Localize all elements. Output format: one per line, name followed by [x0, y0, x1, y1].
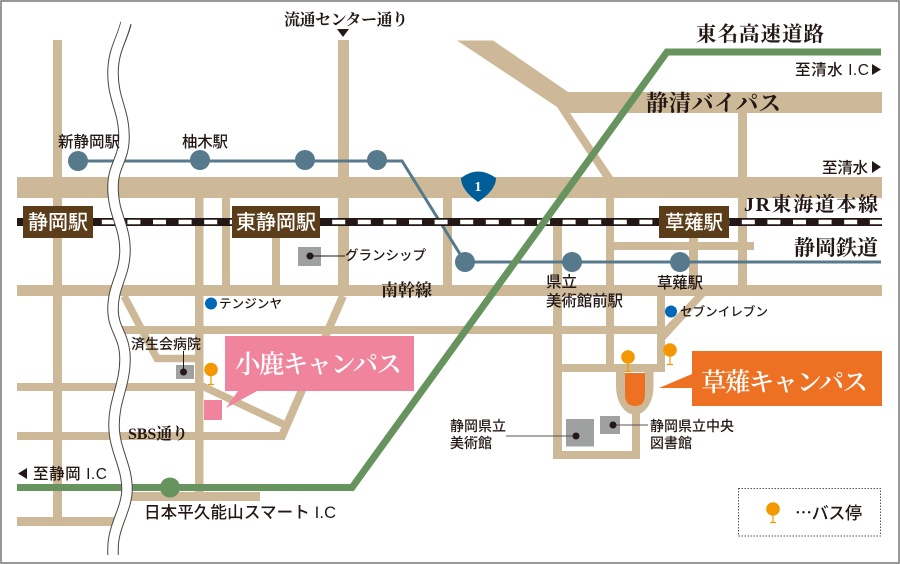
callout: Koshika campus: 小鹿キャンパス: [235, 350, 402, 379]
landmark: Tenjinya: テンジンヤ: [219, 297, 282, 311]
road label: Ryutsu Center-dori: [284, 10, 408, 37]
station label: Kusanagi: [659, 206, 729, 238]
station label: Shizuoka: 静岡駅: [28, 211, 88, 234]
bus stop: Kusanagi east: [663, 343, 677, 364]
line label: JR Tokaido Main Line: JR東海道本線: [744, 192, 878, 216]
road label: Seisei Bypass: 静清バイパス: [646, 91, 781, 116]
marker: Koshika campus: [204, 400, 222, 420]
route 1 shield: [461, 172, 496, 202]
road label: Ryutsu Center-dori: 流通センター通り: [284, 10, 408, 29]
landmark: Shizuoka Prefectural Museum of Art: 美術館: [450, 435, 492, 451]
road label: Nankan Line: 南幹線: [381, 280, 432, 300]
line label: Shizuoka Railway: 静岡鉄道: [794, 236, 878, 260]
label: Nihondaira Kunozan Smart IC: 日本平久能山スマート I.C: [144, 503, 336, 522]
station name: Kenritsu Bijutsukan-mae: 県立: [546, 273, 577, 291]
landmark: Granship: グランシップ: [345, 247, 426, 263]
station label: Kusanagi: 草薙駅: [665, 212, 723, 234]
landmark: Granship: [298, 247, 426, 266]
landmark: Shizuoka Prefectural Central Library: [600, 416, 734, 451]
direction: to Shimizu: 至清水: [822, 159, 868, 177]
marker: Kusanagi campus: [625, 373, 645, 406]
station label: Higashi-Shizuoka: [232, 206, 320, 238]
Tomei Expressway: [17, 52, 881, 498]
direction: to Shimizu IC: 至清水 I.C: [795, 61, 869, 79]
landmark: Saiseikai Hospital: 済生会病院: [131, 336, 201, 352]
road label: SBS-dori: SBS通り: [128, 425, 188, 443]
station name: Kenritsu Bijutsukan-mae: 美術館前駅: [546, 292, 623, 310]
bus stop: Koshika: [204, 363, 218, 384]
station name: Kusanagi: 草薙駅: [657, 274, 703, 292]
landmark: Seven-Eleven: セブンイレブン: [680, 304, 768, 319]
Shizuoka Railway line: [68, 150, 881, 272]
station label: Shizuoka: [23, 206, 93, 238]
landmark: Saiseikai Hospital: [131, 336, 201, 379]
station name: Shin-Shizuoka: 新静岡駅: [58, 133, 120, 151]
JR Tokaido line: [17, 218, 882, 226]
route 1 shield: 1: [474, 180, 482, 195]
direction: to Shizuoka IC: 至静岡 I.C: [33, 465, 107, 483]
river: [113, 22, 127, 556]
station name: Kenritsu Bijutsukan-mae: [546, 273, 623, 310]
station label: Higashi-Shizuoka: 東静岡駅: [236, 211, 316, 234]
landmark: Shizuoka Prefectural Museum of Art: [450, 418, 594, 451]
legend: bus stop: …バス停: [795, 499, 862, 524]
callout: Koshika campus: [225, 336, 414, 408]
landmark: Shizuoka Prefectural Central Library: 図書館: [650, 435, 692, 451]
station name: Yunoki: 柚木駅: [182, 133, 228, 151]
bus stop: Kusanagi south: [621, 350, 635, 372]
road label: Tomei Expressway: 東名高速道路: [696, 22, 824, 46]
callout: Kusanagi campus: [659, 351, 882, 406]
legend: bus stop: [738, 488, 880, 536]
landmark: Shizuoka Prefectural Museum of Art: 静岡県立: [450, 418, 506, 434]
callout: Kusanagi campus: 草薙キャンパス: [701, 368, 868, 397]
landmark: Shizuoka Prefectural Central Library: 静岡県立中央: [650, 418, 734, 434]
